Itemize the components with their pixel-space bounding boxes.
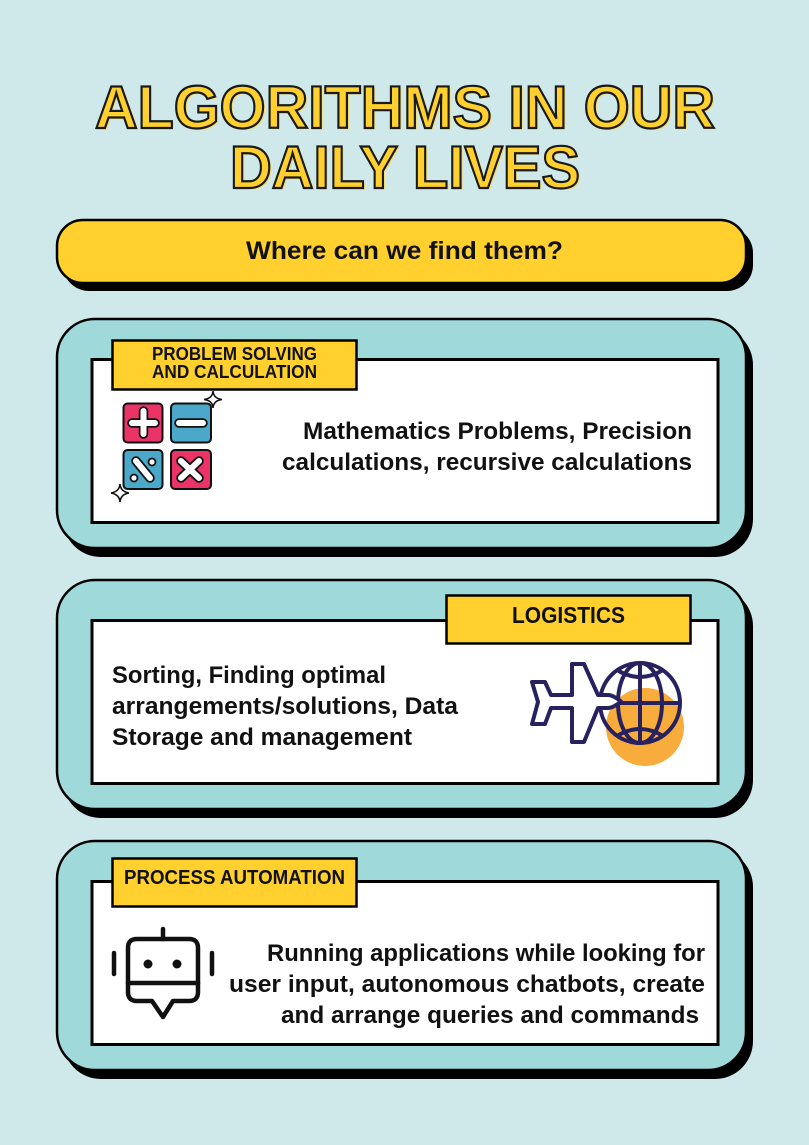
panel 3 heading tag: [112, 858, 356, 906]
panel 3 heading tag: PROCESS AUTOMATION: [124, 867, 345, 889]
panel 3 text: Running applications while looking for: [267, 940, 705, 967]
panel 3 text: and arrange queries and commands: [281, 1002, 699, 1029]
title: ALGORITHMS IN OUR: [97, 76, 717, 142]
panel 2 background: [57, 580, 753, 818]
panel 2 heading tag: LOGISTICS: [512, 602, 625, 628]
panel 3 background: [57, 841, 753, 1079]
panel 3 text: user input, autonomous chatbots, create: [229, 971, 705, 998]
panel 1 heading tag: [112, 340, 356, 390]
title: ALGORITHMS IN OUR: [95, 74, 715, 141]
panel 1 heading tag: AND CALCULATION: [152, 362, 317, 382]
panel 1 text: Mathematics Problems, Precision: [303, 418, 692, 445]
panel 2 text: arrangements/solutions, Data: [112, 693, 459, 720]
panel: logistics: [57, 580, 753, 818]
title: DAILY LIVES: [232, 136, 582, 202]
icon: plane and globe: [532, 663, 684, 766]
title: [95, 74, 717, 202]
panel: problem solving and calculation: [57, 319, 753, 557]
icon: calculator symbols: [111, 391, 222, 502]
panel 2 heading tag: [446, 596, 690, 644]
panel 2 text: Storage and management: [112, 724, 412, 751]
icon: robot chatbot: [114, 929, 212, 1017]
subtitle pill: Where can we find them?: [246, 237, 563, 265]
subtitle pill: [57, 220, 753, 291]
panel 1 heading tag: PROBLEM SOLVING: [152, 344, 317, 364]
panel 2 text: Sorting, Finding optimal: [112, 662, 386, 689]
panel 1 text: calculations, recursive calculations: [282, 449, 692, 476]
panel 1 text: [282, 418, 692, 476]
panel 2 text: [112, 662, 459, 751]
panel: process automation: [57, 841, 753, 1079]
title: DAILY LIVES: [230, 134, 580, 201]
panel 3 text: [229, 940, 705, 1029]
panel 1 background: [57, 319, 753, 557]
